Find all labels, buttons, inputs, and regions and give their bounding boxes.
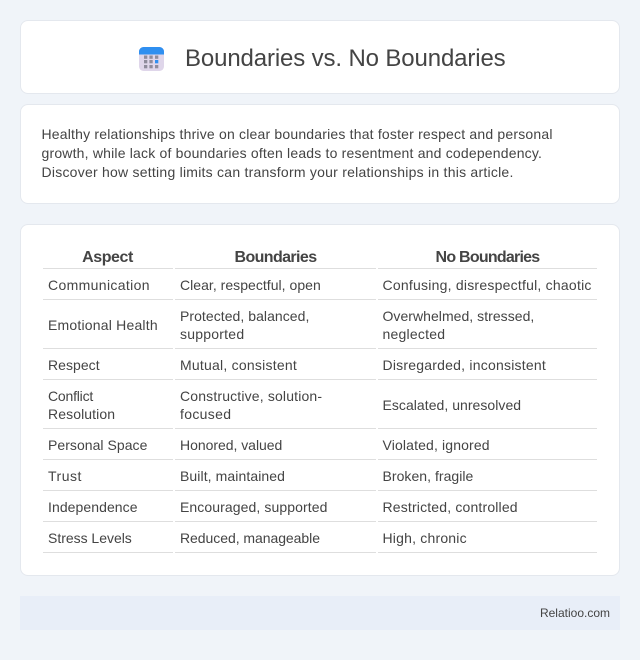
comparison table: supported (180, 326, 244, 342)
comparison table: Encouraged, supported (180, 499, 327, 515)
comparison table: Honored, valued (180, 437, 282, 453)
comparison table: Reduced, manageable (180, 530, 320, 546)
row: Communication (48, 277, 592, 293)
comparison table: Trust (48, 468, 82, 484)
comparison table: Broken, fragile (382, 468, 473, 484)
row: Emotional Health (48, 308, 534, 342)
row: Respect (48, 357, 546, 373)
comparison table: Escalated, unresolved (382, 397, 521, 413)
comparison table: Violated, ignored (382, 437, 490, 453)
header card (20, 20, 620, 94)
header: Aspect: Aspect (82, 249, 133, 266)
comparison table: Overwhelmed, stressed, (382, 308, 534, 324)
row: Trust (48, 468, 473, 484)
intro text: Healthy relationships thrive on clear boundaries that foster respect and personal (42, 126, 553, 142)
comparison table: Restricted, controlled (382, 499, 518, 515)
row: Stress Levels (48, 530, 467, 546)
comparison table: Stress Levels (48, 530, 132, 546)
footer text: Relatioo.com (540, 606, 610, 620)
comparison table: Clear, respectful, open (180, 277, 321, 293)
comparison table: focused (180, 406, 231, 422)
row: Independence (48, 499, 518, 515)
comparison table: Emotional Health (48, 317, 158, 333)
comparison table: Personal Space (48, 437, 147, 453)
comparison table: Respect (48, 357, 100, 373)
comparison table: High, chronic (382, 530, 467, 546)
comparison table: Constructive, solution- (180, 388, 322, 404)
intro text: Discover how setting limits can transform your relationships in this article. (42, 164, 514, 180)
comparison table: Conflict (48, 388, 93, 404)
comparison table: Built, maintained (180, 468, 285, 484)
intro text: growth, while lack of boundaries often leads to resentment and codependency. (42, 145, 542, 161)
row: Conflict Resolution (48, 388, 521, 422)
comparison table: Mutual, consistent (180, 357, 297, 373)
header: Boundaries: Boundaries (234, 249, 317, 266)
comparison table: Confusing, disrespectful, chaotic (382, 277, 592, 293)
comparison table: Communication (48, 277, 150, 293)
comparison table: Independence (48, 499, 138, 515)
intro text (42, 126, 553, 180)
icon: calendar (139, 47, 164, 71)
footer bar (20, 596, 620, 630)
table card (20, 224, 620, 576)
header: No Boundaries: No Boundaries (436, 249, 539, 266)
comparison table: neglected (382, 326, 445, 342)
comparison table: Protected, balanced, (180, 308, 309, 324)
title: Boundaries vs. No Boundaries (185, 45, 506, 72)
comparison table: Resolution (48, 406, 115, 422)
row: Personal Space (48, 437, 490, 453)
comparison table: Disregarded, inconsistent (382, 357, 546, 373)
intro card (20, 104, 620, 204)
